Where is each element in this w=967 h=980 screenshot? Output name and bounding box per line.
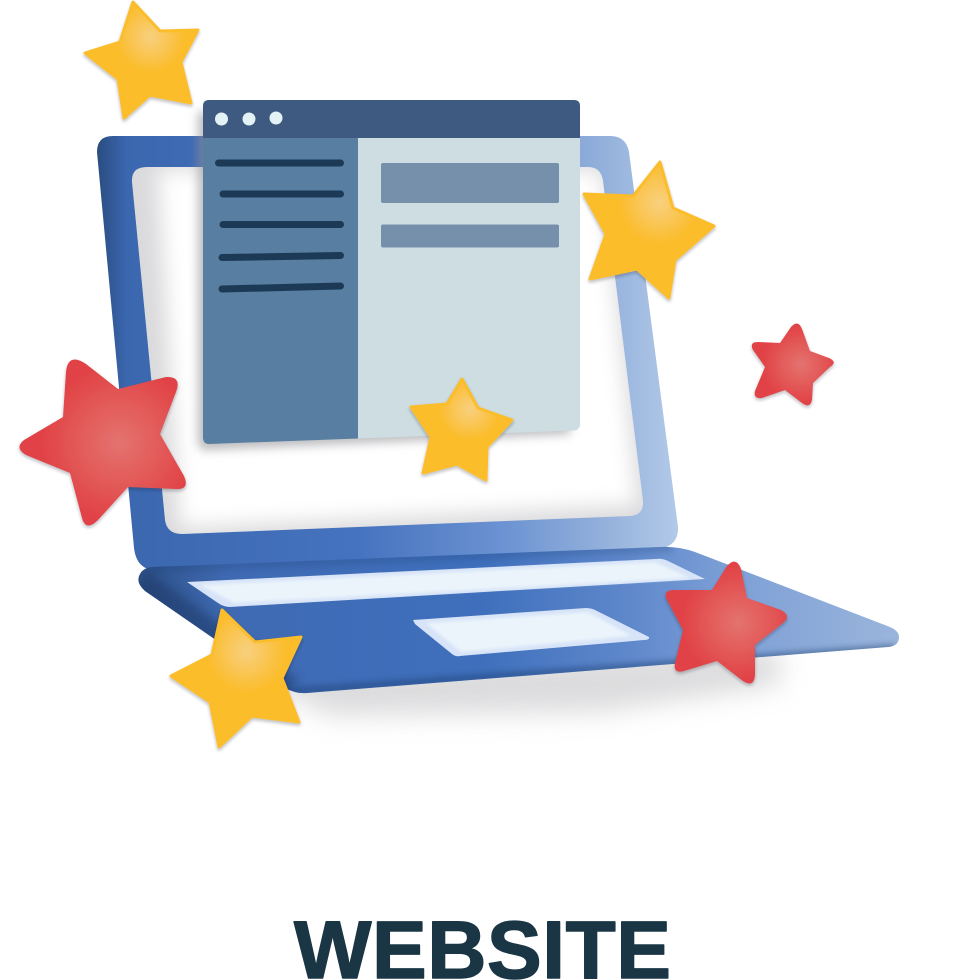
star: right small red bbox=[752, 323, 834, 405]
star: bottom gold bbox=[171, 610, 301, 747]
star: center gold bbox=[411, 379, 512, 480]
sidebar menu lines bbox=[218, 163, 340, 289]
window shadow bbox=[198, 112, 570, 450]
browser window bbox=[198, 100, 580, 450]
base edge shading bbox=[140, 547, 895, 692]
window title bar bbox=[203, 100, 580, 138]
content block small bbox=[381, 224, 559, 248]
star: top left gold bbox=[85, 2, 198, 118]
star: left large red bbox=[19, 360, 186, 526]
window content pane bbox=[358, 130, 580, 438]
laptop screen bbox=[120, 160, 660, 540]
keyboard strip bbox=[187, 559, 705, 607]
star: top right gold bbox=[584, 162, 714, 298]
laptop base bbox=[138, 547, 899, 693]
laptop lid bbox=[97, 136, 678, 569]
laptop bbox=[97, 136, 899, 693]
ground shadow bbox=[230, 650, 780, 716]
trackpad bbox=[413, 608, 649, 656]
window control dots bbox=[215, 112, 282, 126]
window sidebar bbox=[203, 130, 358, 444]
content block large bbox=[381, 163, 559, 203]
star: keyboard red bbox=[666, 562, 787, 683]
